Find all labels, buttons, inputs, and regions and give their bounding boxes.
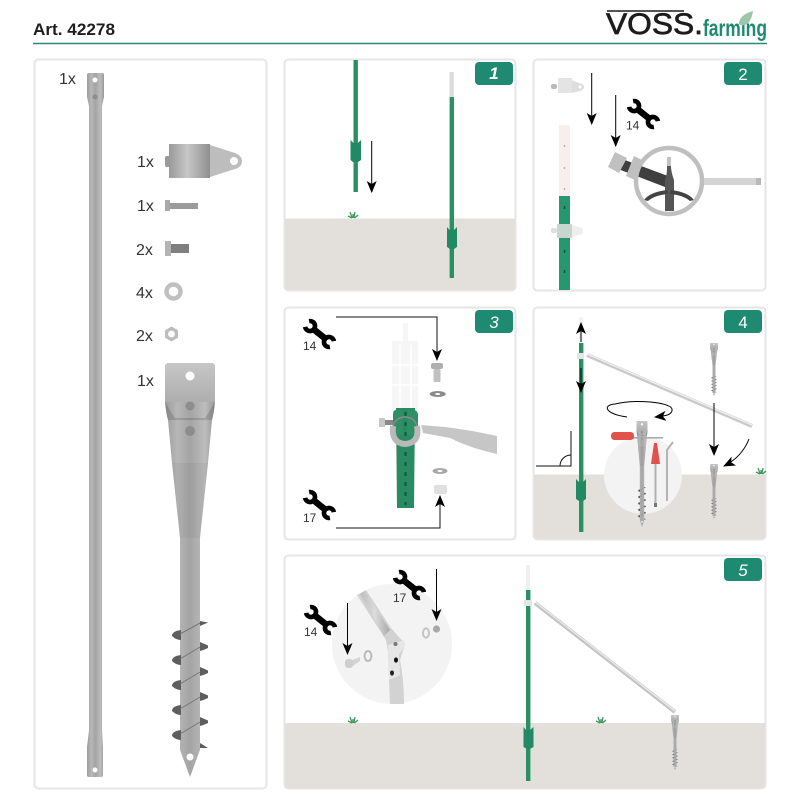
arrows (592, 73, 616, 146)
bolt and washer (345, 651, 371, 668)
faded post top (392, 323, 418, 412)
bent rod (667, 442, 673, 501)
step badge 4: 4 (738, 313, 748, 332)
quantity labels: 1x (59, 71, 76, 88)
quantity labels: 1x (137, 198, 154, 215)
logo: VOSS.farming: farming (703, 15, 767, 41)
wrench 14 (626, 101, 658, 132)
panel: parts list (34, 60, 266, 788)
rotation arrow (607, 402, 672, 417)
grass (756, 468, 766, 474)
wrench 14: 14 (303, 339, 317, 353)
panel 1: driving the post (284, 60, 516, 290)
brace rod (587, 354, 752, 426)
panel 3: bolting the brace (284, 308, 516, 540)
part: nut (165, 326, 178, 342)
part: short bolt (165, 241, 189, 256)
arrow to nut (336, 496, 440, 528)
upper ground screw (710, 343, 718, 396)
wrench 17 (303, 492, 334, 525)
header: article number: Art. 42278 (33, 21, 115, 39)
wrench 17: 17 (393, 591, 407, 605)
step badge 3: 3 (489, 313, 499, 332)
part: brace rod (87, 73, 104, 777)
arrow to top bolt (336, 317, 437, 360)
post section (393, 408, 418, 508)
wrench 14 (303, 321, 334, 353)
step badge 3 (475, 310, 513, 333)
screw with red handle (611, 421, 663, 527)
part: long bolt (165, 200, 198, 211)
step badge 1: 1 (489, 64, 499, 83)
part: washer (166, 284, 180, 298)
clamp bolt (379, 418, 393, 427)
detail circle (604, 436, 682, 514)
bottom washer and nut (432, 468, 448, 494)
post in ground (447, 72, 457, 278)
grass (348, 717, 358, 723)
arrow down to anchor (713, 403, 715, 455)
panel 4: placing the ground screw (534, 308, 766, 540)
part: ground screw (165, 363, 215, 777)
clamp ring (393, 417, 418, 444)
clamp (551, 78, 584, 93)
right angle (536, 431, 571, 466)
washer and nut (423, 625, 440, 638)
wrench 14: 14 (304, 625, 318, 639)
curved arrow (724, 439, 749, 466)
panel 2: clamp attachment (534, 60, 766, 290)
brace end (421, 425, 497, 454)
detail circle (332, 584, 452, 704)
ground (285, 723, 765, 788)
quantity labels: 4x (136, 285, 153, 302)
grass (348, 212, 358, 218)
post (576, 317, 586, 532)
bolt detail (608, 148, 761, 214)
logo: VOSS.farming: VOSS. (606, 8, 703, 41)
wrench 14 (304, 607, 335, 639)
quantity labels (59, 71, 154, 390)
panel 5: final assembly (284, 556, 766, 788)
part: clamp (165, 144, 242, 178)
quantity labels: 2x (136, 242, 153, 259)
post (524, 565, 534, 781)
arrow to bolt (346, 603, 348, 654)
arrow to nut (436, 569, 438, 620)
step badge 2: 2 (738, 65, 748, 84)
arrow down (580, 368, 582, 392)
quantity labels: 1x (137, 373, 154, 390)
top bolt and washer (430, 363, 446, 397)
brace joint detail (357, 590, 405, 704)
header rule (33, 42, 767, 44)
ground (285, 218, 515, 290)
post falling (350, 60, 361, 192)
lower ground screw (710, 464, 718, 519)
ground screw (671, 715, 679, 770)
ground (534, 474, 765, 539)
step badge 4 (724, 310, 762, 333)
arrow (371, 141, 373, 192)
step badge 2 (724, 62, 762, 85)
brace rod (535, 602, 675, 712)
wrench 17 (393, 572, 424, 605)
wrench 17: 17 (303, 511, 317, 525)
T-handle tool (651, 443, 660, 507)
step badge 5 (724, 558, 762, 581)
step badge 5: 5 (738, 561, 748, 580)
post with faded upper section (551, 125, 583, 290)
arrow up (580, 323, 582, 342)
quantity labels: 1x (137, 154, 154, 171)
icon: leaf (739, 11, 753, 25)
wrench 14: 14 (626, 118, 640, 132)
quantity labels: 2x (136, 328, 153, 345)
step badge 1 (475, 62, 513, 85)
logo: VOSS.farming (606, 8, 767, 41)
